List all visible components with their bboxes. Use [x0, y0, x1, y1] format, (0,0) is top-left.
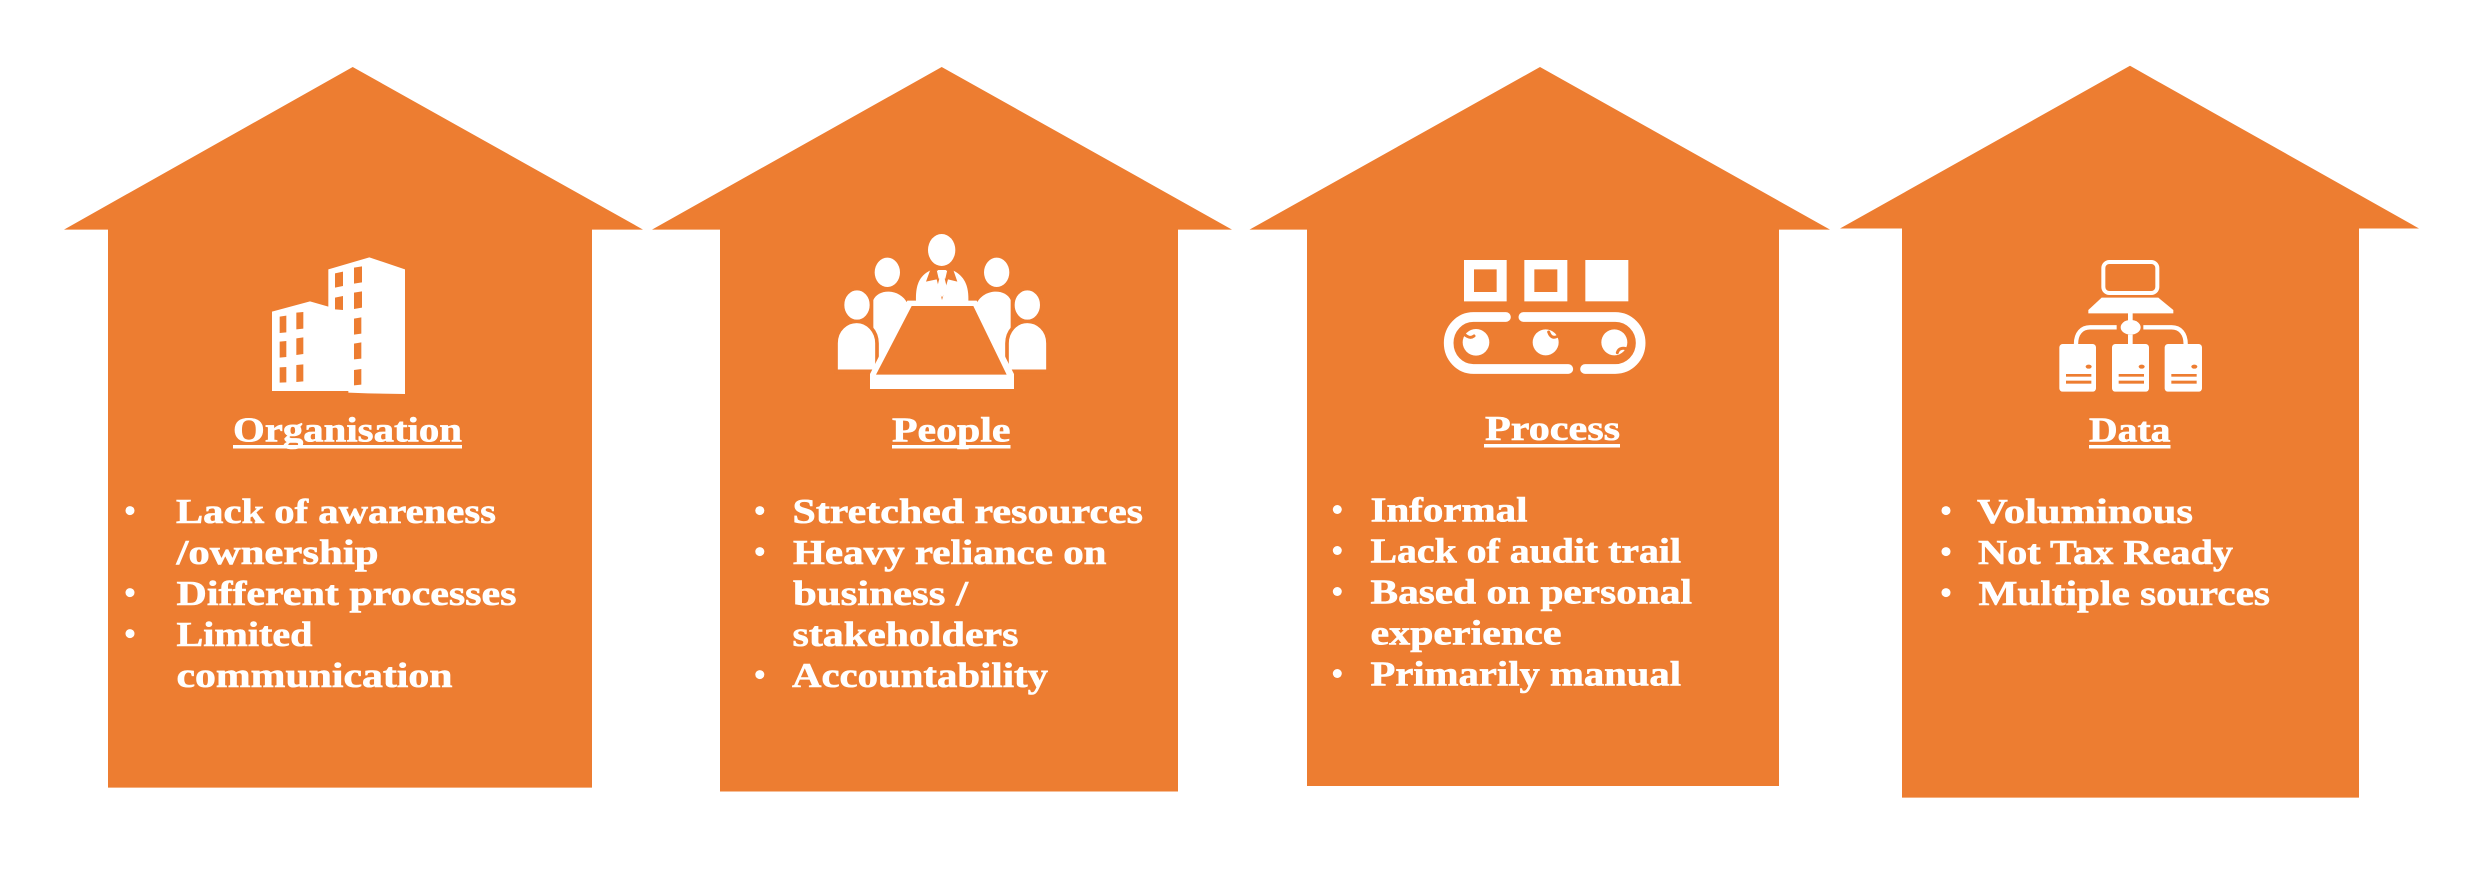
bullet list: data: Not Tax Ready: [1978, 533, 2234, 572]
heading: Process: Process: [1485, 409, 1620, 448]
bullet list: organisation: Lack of awareness: [176, 492, 496, 531]
panel: data: [1840, 66, 2419, 798]
bullet list: data: Multiple sources: [1978, 574, 2270, 613]
bullet list: process: Informal: [1370, 491, 1528, 530]
icon: computer network with servers: [2059, 262, 2202, 392]
bullet list: people: [755, 492, 1143, 695]
bullet list: organisation: communication: [176, 656, 452, 695]
panel: people: [652, 67, 1232, 792]
bullet list: process: experience: [1370, 614, 1562, 653]
panel: organisation: [64, 67, 643, 788]
bullet list: organisation: Limited: [176, 615, 313, 654]
heading: Data: Data: [2089, 410, 2170, 450]
bullet list: organisation: /ownership: [175, 533, 378, 572]
bullet list: process: Primarily manual: [1370, 655, 1681, 694]
bullet list: data: [1942, 492, 2270, 613]
bullet list: data: Voluminous: [1977, 492, 2193, 531]
bullet list: people: Accountability: [792, 656, 1049, 695]
bullet list: people: Stretched resources: [792, 492, 1143, 531]
icon: office buildings: [272, 257, 405, 394]
bullet list: people: stakeholders: [792, 615, 1018, 654]
bullet list: people: Heavy reliance on: [793, 533, 1106, 572]
house arrow shape: data: [1840, 66, 2419, 798]
panel: process: [1250, 67, 1830, 786]
house arrow shape: process: [1250, 67, 1830, 786]
bullet list: process: Based on personal: [1370, 573, 1692, 612]
bullet list: process: [1333, 491, 1692, 694]
house arrow shape: people: [652, 67, 1232, 792]
bullet list: people: business /: [793, 574, 970, 613]
house arrow shape: organisation: [64, 67, 643, 788]
bullet list: organisation: Different processes: [176, 574, 516, 613]
heading: People: People: [892, 410, 1010, 450]
bullet list: organisation: [126, 492, 516, 695]
heading: Organisation: Organisation: [233, 410, 462, 450]
bullet list: process: Lack of audit trail: [1370, 532, 1681, 571]
icon: conveyor belt: [1449, 260, 1641, 369]
icon: meeting table with people: [836, 234, 1048, 389]
